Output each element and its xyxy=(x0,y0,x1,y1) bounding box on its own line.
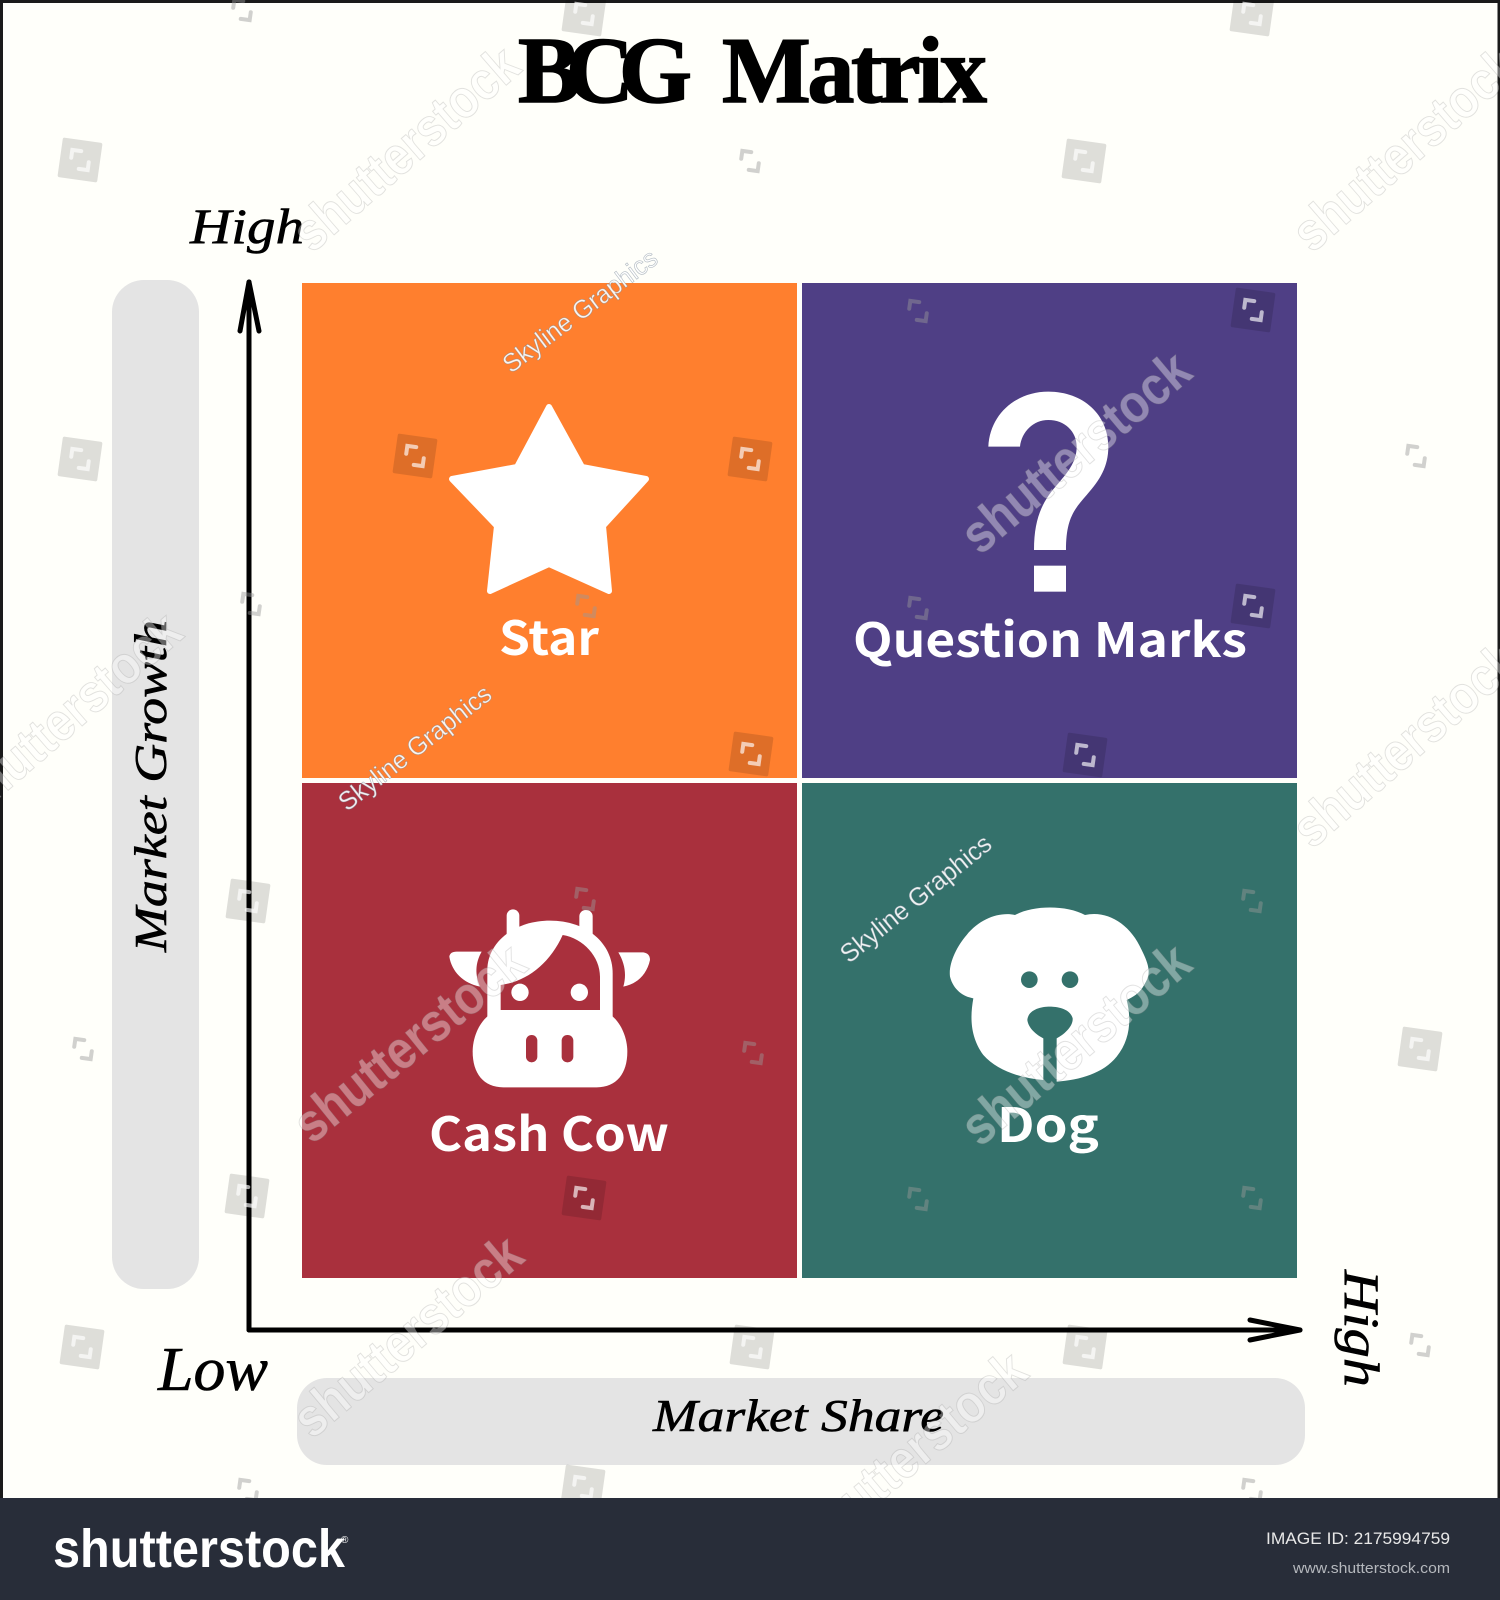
watermark overlay: shutterstock xyxy=(949,931,1203,1157)
watermark overlay: shutterstock xyxy=(281,34,532,263)
icon: question mark xyxy=(988,392,1108,592)
axis title: market growth: Market Growth xyxy=(125,620,176,953)
footer logo registered mark: ® xyxy=(341,1535,349,1546)
icon: cow xyxy=(449,909,650,1087)
footer website: www.shutterstock.com xyxy=(1292,1560,1450,1577)
stock credit: skyline graphics 3: Skyline Graphics xyxy=(834,828,997,969)
watermark overlay: shutterstock xyxy=(281,1223,535,1449)
question marks label: Question Marks xyxy=(853,602,1247,671)
star label: Star xyxy=(499,600,600,669)
axis band: market growth xyxy=(112,280,199,1289)
footer logo: shutterstock xyxy=(53,1519,346,1579)
watermark overlay: shutterstock xyxy=(282,931,538,1154)
panel: dog xyxy=(802,783,1297,1278)
dog label: Dog xyxy=(997,1087,1099,1156)
y axis arrow xyxy=(240,282,259,1330)
label: high on y axis: High xyxy=(189,198,304,254)
cash cow label: Cash Cow xyxy=(429,1096,669,1165)
axis band: market share xyxy=(297,1378,1305,1465)
x axis arrow xyxy=(249,1320,1300,1340)
label: low at origin: Low xyxy=(157,1336,268,1404)
panel: cash cow xyxy=(302,783,797,1278)
watermark overlay: shutterstock xyxy=(785,1339,1039,1565)
panel: star xyxy=(302,283,797,778)
axis title: market share: Market Share xyxy=(652,1390,944,1441)
icon: star xyxy=(452,407,646,591)
title xyxy=(518,19,987,123)
footer image id: IMAGE ID: 2175994759 xyxy=(1266,1529,1450,1548)
label: high on x axis: High xyxy=(1334,1269,1390,1387)
watermark overlay: shutterstock xyxy=(949,339,1203,565)
stock credit: skyline graphics 2: Skyline Graphics xyxy=(332,679,497,817)
title: Matrix xyxy=(722,19,987,123)
stock credit: skyline graphics 1: Skyline Graphics xyxy=(497,243,663,379)
footer bar xyxy=(0,1498,1500,1600)
icon: dog xyxy=(950,907,1149,1082)
panel: question marks xyxy=(802,283,1297,778)
title: BCG xyxy=(518,19,692,123)
